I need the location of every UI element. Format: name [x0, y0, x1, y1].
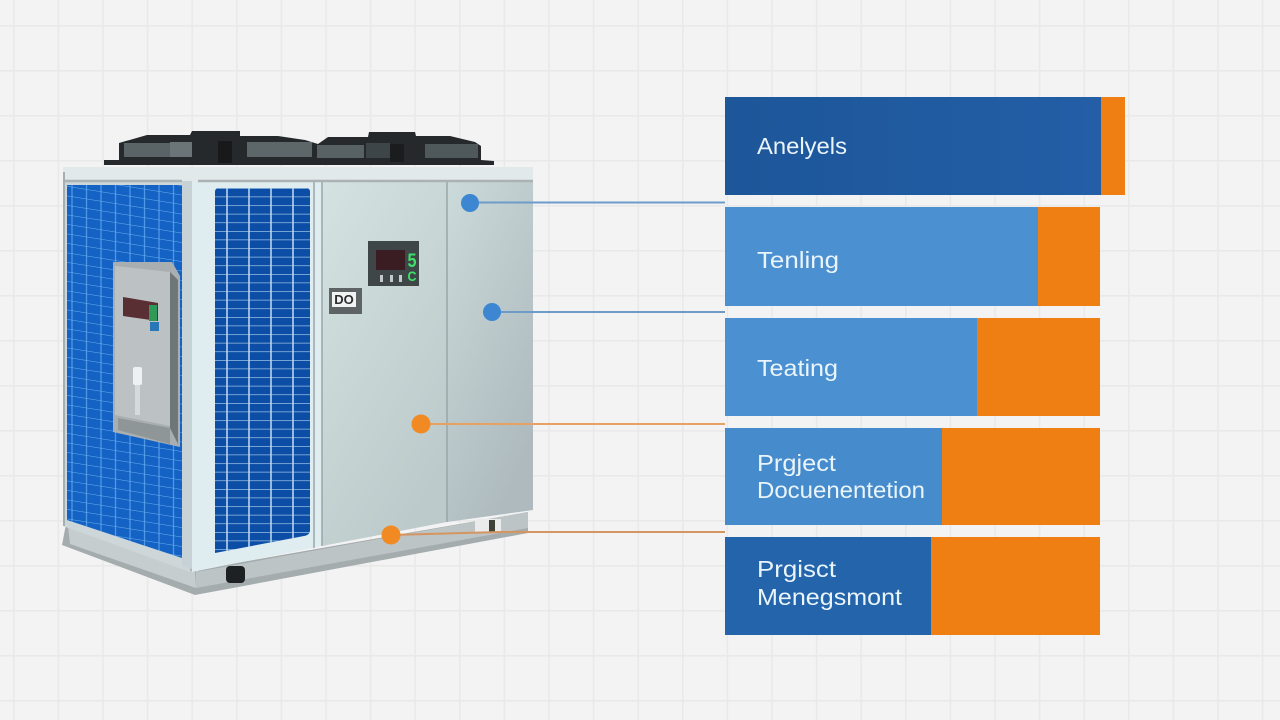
- bar: Tenling: Tenling: [757, 247, 839, 273]
- bar: Project Documentation: [725, 428, 1100, 525]
- base frame: [62, 512, 528, 595]
- bar: Teating: Teating: [757, 355, 838, 381]
- right panel: [447, 180, 533, 522]
- digital controller: [368, 241, 419, 286]
- middle panel: [322, 180, 447, 546]
- icon: drain foot: [226, 566, 245, 583]
- panel seams: [314, 180, 447, 548]
- bar: Tenling: [725, 207, 1100, 306]
- connector: Project Documentation: [382, 526, 725, 544]
- connector: Tenling: [483, 303, 725, 321]
- bar: Project Documentation: Prgject: [757, 450, 837, 476]
- side face: [63, 172, 190, 572]
- icon: roof fans: [104, 131, 494, 165]
- front left panel: [192, 170, 322, 572]
- handle: [133, 367, 142, 385]
- bar: Teating: [725, 318, 1100, 416]
- nameplate: [329, 288, 362, 314]
- display: [123, 297, 158, 321]
- valve fitting: [475, 519, 501, 532]
- nameplate: DO: [334, 292, 354, 307]
- top cap: [63, 167, 533, 181]
- control box: [113, 262, 180, 447]
- bar: Analysis: Anelyels: [757, 133, 847, 159]
- digital controller: 5: [408, 251, 417, 272]
- bar: Project Management: Prgisct: [757, 556, 837, 582]
- illustration: air-conditioning unit: [62, 131, 533, 595]
- bar: Project Management: [725, 537, 1100, 635]
- front coil: [215, 188, 310, 553]
- bar: Project Management: Menegsmont: [757, 584, 903, 610]
- side coil: [67, 185, 182, 558]
- bar: Project Documentation: Docuenentetion: [757, 477, 925, 503]
- digital controller: C: [408, 268, 416, 284]
- connector: Testing: [412, 414, 725, 434]
- corner post: [182, 174, 198, 572]
- bar: Analysis: [725, 97, 1125, 195]
- connector: Analysis: [461, 194, 725, 212]
